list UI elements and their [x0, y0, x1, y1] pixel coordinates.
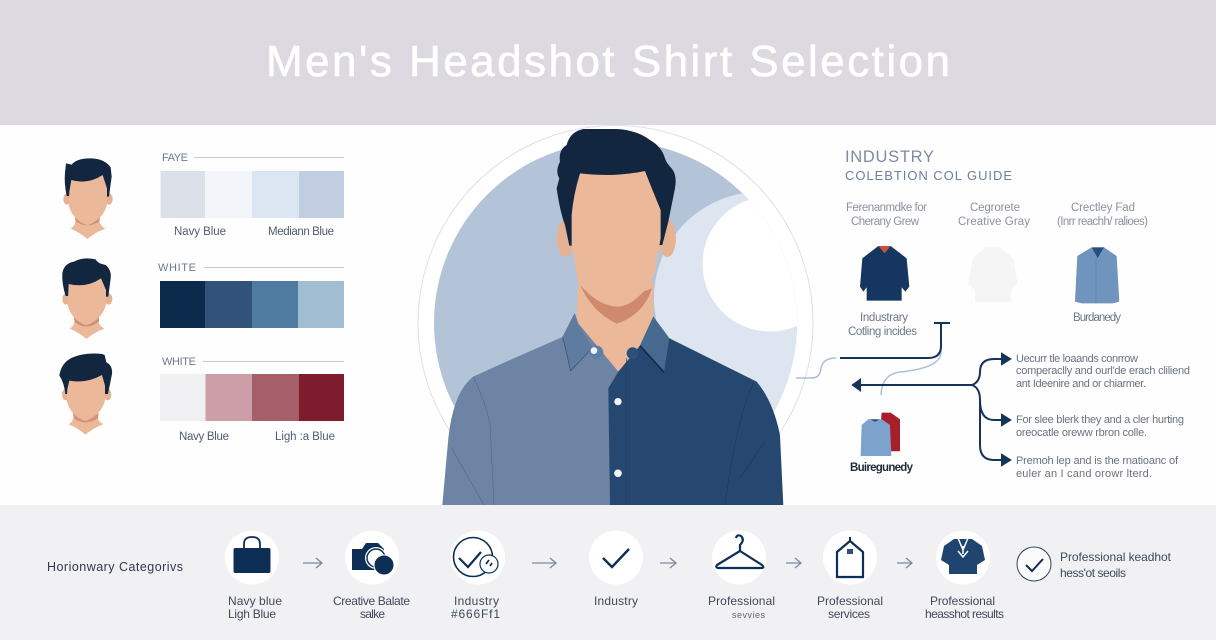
step: hanger: sevvies — [732, 610, 766, 620]
icon: head one — [63, 158, 113, 239]
panel: process strip — [47, 530, 1172, 621]
neck shadow — [580, 284, 652, 324]
buttons — [590, 346, 639, 477]
text block: note one — [1016, 353, 1190, 390]
text block: note two — [1016, 414, 1184, 439]
arrow — [660, 558, 676, 568]
column captions: Creative Gray — [958, 216, 1030, 228]
step: check: Industry — [594, 594, 638, 608]
shirt captions: Cotling incides — [848, 326, 917, 338]
result: professional headshot — [1017, 547, 1172, 581]
step: shirt: heasshot results — [925, 607, 1004, 621]
arrow — [897, 558, 912, 568]
text block: note three: Premoh lep and is the rnatioanc of — [1016, 455, 1179, 467]
header band — [0, 0, 1216, 125]
footer band — [0, 505, 1216, 640]
heading: row three: WHITE — [162, 356, 196, 368]
shirt captions: Burdanedy — [1073, 312, 1121, 324]
column captions: Ferenanmdke for — [846, 202, 927, 214]
result: professional headshot: Professional keadhot — [1060, 550, 1172, 564]
shirt captions: Industrary — [860, 312, 908, 324]
panel: industry guide — [796, 148, 1190, 480]
heading — [845, 148, 1012, 183]
connector: shirts to portrait — [796, 323, 950, 395]
title: Men's Headshot Shirt Selection — [266, 37, 950, 86]
text block: note three: euler an I cand orowr lterd. — [1016, 468, 1152, 480]
step: camera — [333, 530, 410, 621]
shirt: dark half — [608, 317, 783, 505]
neck — [577, 282, 653, 373]
step: check with badge — [451, 530, 505, 621]
seams — [452, 358, 765, 505]
arrow — [786, 558, 801, 568]
heading: categories: Horionwary Categorivs — [47, 560, 183, 574]
column captions: Crectley Fad — [1071, 202, 1135, 214]
label: row one: Mediann Blue — [268, 226, 334, 238]
step: bag: Navy blue — [228, 594, 282, 608]
palette: row two — [160, 281, 344, 328]
label: row three: Ligh :a Blue — [275, 431, 335, 443]
step: hanger: Professional — [708, 594, 775, 608]
face — [572, 171, 661, 307]
step: bag: Ligh Blue — [228, 607, 276, 621]
step: bag — [225, 530, 282, 621]
column captions — [846, 202, 1148, 228]
step: check — [589, 530, 643, 608]
step: tag: Professional — [817, 594, 883, 608]
text block: note two: oreocatle oreww rbron colle. — [1016, 427, 1147, 439]
arrow — [303, 558, 322, 568]
arrow — [532, 558, 556, 568]
step: check with badge: Industry — [454, 594, 499, 608]
hair — [557, 129, 676, 246]
step: shirt — [925, 530, 1004, 621]
collar: left — [563, 313, 593, 371]
icon: white shirt — [968, 247, 1017, 302]
step: tag — [817, 530, 883, 621]
icon: navy shirt — [860, 246, 909, 301]
step: camera: salke — [360, 607, 385, 621]
text block: note one: ant Ideenire and or chiarmer. — [1016, 378, 1146, 390]
text block: note three — [1016, 455, 1179, 480]
panel: face shapes and palettes — [59, 152, 344, 443]
shirt captions — [848, 312, 1121, 338]
step: hanger — [708, 530, 775, 620]
icon: head three — [59, 354, 112, 435]
palette: row one — [160, 171, 344, 218]
shirt: light half — [442, 313, 618, 505]
result: professional headshot: hess'ot seoils — [1060, 566, 1126, 580]
label: row three — [179, 431, 335, 443]
column captions: Cegrorete — [970, 202, 1020, 214]
portrait backdrop — [418, 125, 814, 500]
label: row three: Navy Blue — [179, 431, 229, 443]
heading: row one: FAYE — [162, 152, 188, 164]
step: tag: services — [828, 607, 870, 621]
text block: note two: For slee blerk they and a cler hurting — [1016, 414, 1184, 426]
portrait: man in two-tone shirt — [442, 129, 783, 505]
icon: blue shirt — [1075, 247, 1119, 303]
icon: head two — [62, 258, 112, 339]
step: camera: Creative Balate — [333, 594, 410, 608]
step: check with badge: #666Ff1 — [451, 607, 500, 621]
step: shirt: Professional — [930, 594, 995, 608]
text block: note one: Uecurr tle loaands conrrow — [1016, 353, 1138, 365]
heading: COLEBTION COL GUIDE — [845, 168, 1012, 183]
heading: row two: WHITE — [158, 262, 196, 274]
label: row one: Navy Blue — [174, 226, 226, 238]
arrows: branch tree — [853, 354, 1010, 465]
label: layered shirts: Buiregunedy — [850, 462, 914, 474]
label: row one — [174, 226, 334, 238]
ears — [557, 220, 676, 257]
palette: row three — [160, 374, 344, 421]
collar: right — [640, 317, 669, 372]
heading: INDUSTRY — [845, 148, 934, 166]
column captions: Cherany Grew — [851, 216, 920, 228]
icon: layered shirts — [861, 413, 900, 456]
column captions: (Inrr reachh/ ralioes) — [1057, 216, 1148, 228]
text block: note one: comperaclly and ourl'de erach cliliend — [1016, 365, 1190, 377]
